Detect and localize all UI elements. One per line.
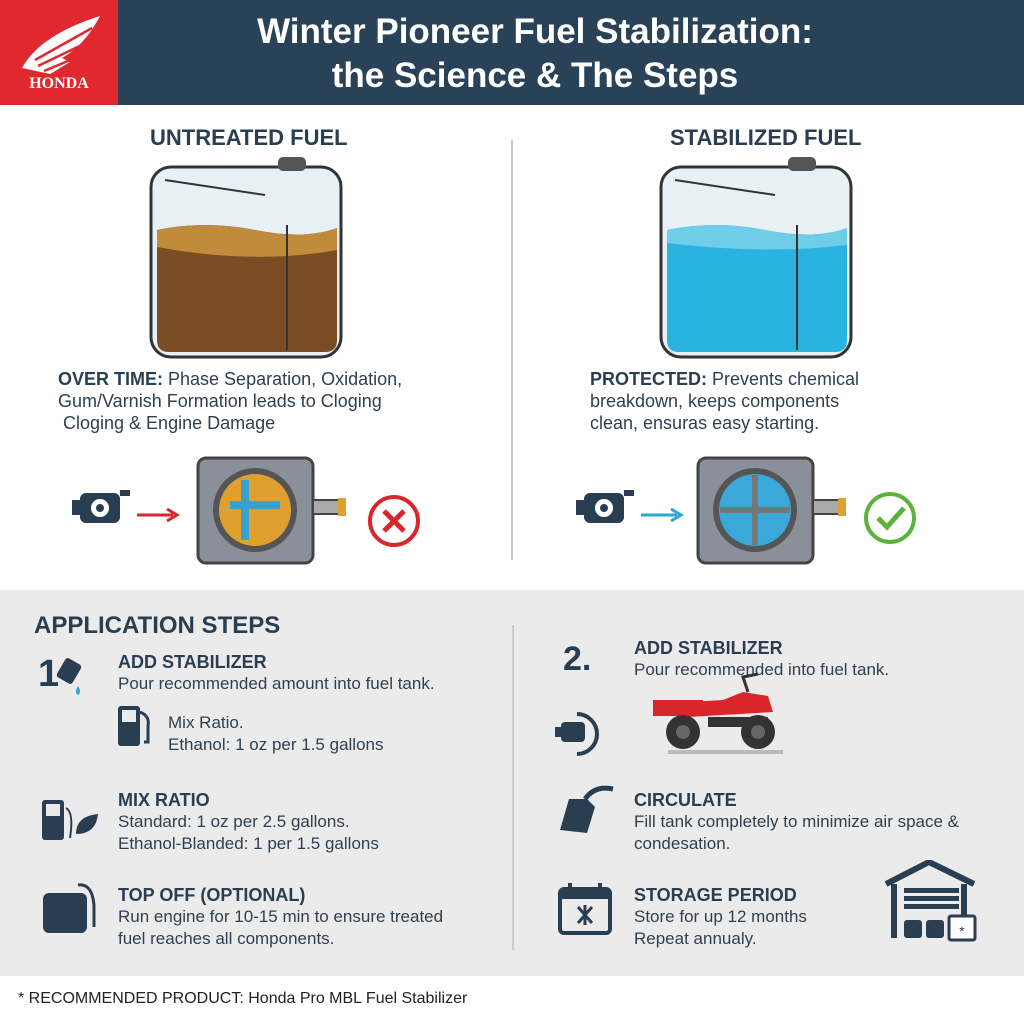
icon: red x [368, 495, 420, 547]
divider [512, 625, 514, 950]
icon: brown tank [150, 157, 342, 358]
icon: pump [118, 706, 150, 746]
text: over time [58, 369, 402, 433]
step: top off: Run engine for 10-15 min to ensure treated fuel reaches all components. [118, 907, 443, 948]
step: storage period: STORAGE PERIOD [634, 885, 797, 905]
title: Winter Pioneer Fuel Stabilization: [257, 12, 813, 51]
heading: untreated: UNTREATED FUEL [150, 125, 348, 150]
step: top off [118, 885, 443, 948]
step: add stabilizer: ADD STABILIZER [118, 652, 267, 672]
step: mix ratio: Standard: 1 oz per 2.5 gallons. [118, 812, 350, 831]
text: protected: PROTECTED: Prevents chemical breakdown, keeps components clean, ensuras easy starting. [590, 369, 859, 433]
number: 2: 2. [563, 640, 591, 678]
step: add stabilizer 2 [634, 638, 889, 679]
panel: untreated fuel [58, 125, 420, 564]
arrow: red [137, 508, 180, 522]
icon: engine cycle [555, 712, 599, 756]
text: over time: Cloging & Engine Damage [63, 413, 275, 433]
title [257, 12, 813, 95]
sub text: mix ratio: Mix Ratio. [168, 713, 244, 732]
logo: honda [0, 0, 118, 105]
footer note: * RECOMMENDED PRODUCT: Honda Pro MBL Fuel Stabilizer [18, 990, 467, 1007]
step: add stabilizer [118, 652, 435, 693]
icon: clean carburetor [696, 456, 846, 564]
icon: step 1 pour: 1 [38, 653, 59, 695]
icon: garage: * [959, 923, 965, 939]
step: circulate: Fill tank completely to minimize air space & condesation. [634, 812, 959, 853]
panel: application steps [0, 590, 1024, 976]
logo: honda: HONDA [29, 75, 89, 92]
icon: jerry can [43, 883, 96, 933]
divider [511, 140, 513, 560]
step: mix ratio [118, 790, 379, 853]
icon: blue tank [660, 157, 852, 358]
icon: green check [864, 492, 916, 544]
heading: stabilized: STABILIZED FUEL [670, 125, 861, 150]
header bar [0, 0, 1024, 105]
heading: application steps: APPLICATION STEPS [34, 612, 280, 639]
step: storage period [634, 885, 807, 948]
icon: pump leaf [42, 800, 98, 840]
panel: stabilized fuel [576, 125, 916, 564]
icon: calendar [558, 883, 612, 935]
step: storage period: Repeat annualy. [634, 929, 757, 948]
step: circulate: CIRCULATE [634, 790, 737, 810]
step: mix ratio: Ethanol-Blanded: 1 per 1.5 gallons [118, 834, 379, 853]
text: over time: OVER TIME: Phase Separation, Oxidation, Gum/Varnish Formation leads to Cloging [58, 369, 402, 411]
arrow: blue [641, 508, 684, 522]
step: storage period: Store for up 12 months [634, 907, 807, 926]
sub text: mix ratio: Ethanol: 1 oz per 1.5 gallons [168, 735, 383, 754]
icon: engine [576, 490, 634, 523]
icon: engine [72, 490, 130, 523]
step: top off: TOP OFF (OPTIONAL) [118, 885, 305, 905]
step: add stabilizer 2: ADD STABILIZER [634, 638, 783, 658]
icon: clogged carburetor [196, 456, 346, 564]
step: circulate [634, 790, 959, 853]
icon: atv [653, 672, 783, 754]
step: mix ratio: MIX RATIO [118, 790, 210, 810]
icon: nozzle [560, 786, 614, 833]
step: add stabilizer 2: Pour recommended into fuel tank. [634, 660, 889, 679]
step: add stabilizer: Pour recommended amount into fuel tank. [118, 674, 435, 693]
icon: step 1 pour [38, 653, 82, 695]
sub text: mix ratio [168, 713, 383, 754]
icon: garage [884, 860, 976, 942]
title: the Science & The Steps [332, 56, 738, 95]
